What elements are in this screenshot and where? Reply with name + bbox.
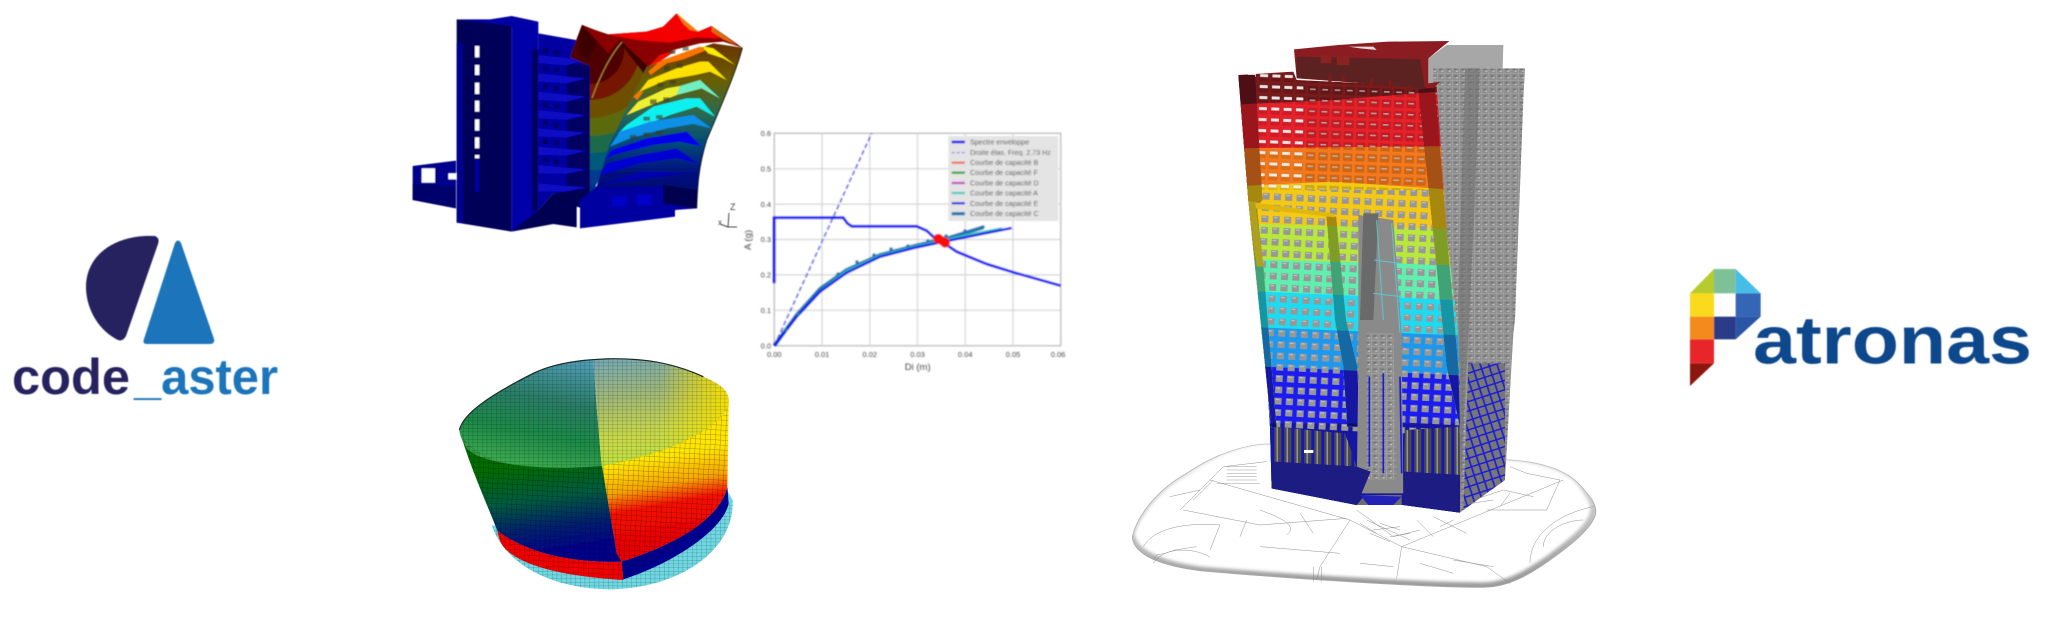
legend: Courbe de capacité C [970,210,1039,218]
wordmark: code_aster: _aster [133,349,278,405]
logo: Patronas [1690,269,2032,386]
tank mesh lines [459,359,733,589]
wordmark: code_aster [12,349,278,405]
tank base ring [492,487,733,589]
logo: code_aster [12,236,278,405]
y axis labels: 0.6 [761,129,771,138]
wordmark: code_aster: code [12,349,130,405]
axis titles: A (g) [743,230,754,250]
tower: ground floor glazing and base [1272,427,1460,513]
legend [948,136,1058,221]
tower: grey undeformed frame [1428,45,1525,513]
y axis labels: 0.1 [761,306,771,315]
y axis labels: 0.4 [761,200,771,209]
y axis labels: 0.3 [761,235,771,244]
tower: crown plant level [1294,41,1449,92]
legend: Droite élas. Freq. 2.73 Hz [970,149,1051,157]
tower: central core [1357,213,1403,493]
tank lid [459,359,729,468]
performance points [933,234,950,248]
x axis labels: 0.06 [1051,350,1065,359]
figure: deformed building model with displacement colour map [413,0,742,232]
x axis labels: 0.04 [958,350,973,359]
figure: high-rise tower model on site plan [1132,41,1596,587]
building: deforming wing with colour bands [569,12,744,230]
y axis labels: 0.5 [761,164,771,173]
tank base red and blue segments [497,487,729,580]
dashed elastic line [774,133,872,346]
figure: cylindrical tank mesh with colour map [459,359,733,589]
legend: Courbe de capacité E [970,200,1038,208]
legend: Courbe de capacité A [970,190,1038,198]
x axis labels: 0.05 [1006,350,1020,359]
icon: Patronas colour-block P [1690,269,1761,386]
envelope spectrum line [774,218,1061,286]
x axis labels: 0.02 [862,350,877,359]
x axis labels: 0.01 [815,350,829,359]
tank wall [459,403,729,562]
icon: xyz axis triad: x [718,218,722,227]
x axis labels: 0.00 [767,350,782,359]
capacity curves [774,225,1012,346]
y axis labels [761,129,771,350]
legend: Courbe de capacité B [970,159,1038,167]
tower: colour-banded front facade [1238,72,1460,513]
legend: Courbe de capacité D [970,180,1039,188]
y axis labels: 0.2 [761,271,771,280]
x axis labels: 0.03 [910,350,925,359]
axis titles: Di (m) [905,362,931,373]
building: blue undeformed tower [413,16,613,232]
icon: code_aster half disc and triangle [86,236,214,344]
icon: xyz axis triad: Z [730,202,736,212]
legend: Courbe de capacité F [970,169,1038,177]
icon: xyz axis triad [718,202,737,227]
plot area and gridlines [774,133,1061,346]
axis titles [743,230,931,373]
legend: Spectre enveloppe [970,138,1029,146]
site plan slab [1132,444,1596,587]
x axis labels [767,350,1065,359]
chart: capacity curves vs envelope spectrum [743,129,1065,373]
wordmark: atronas: atronas [1753,302,2032,378]
y axis labels: 0.0 [761,342,771,350]
